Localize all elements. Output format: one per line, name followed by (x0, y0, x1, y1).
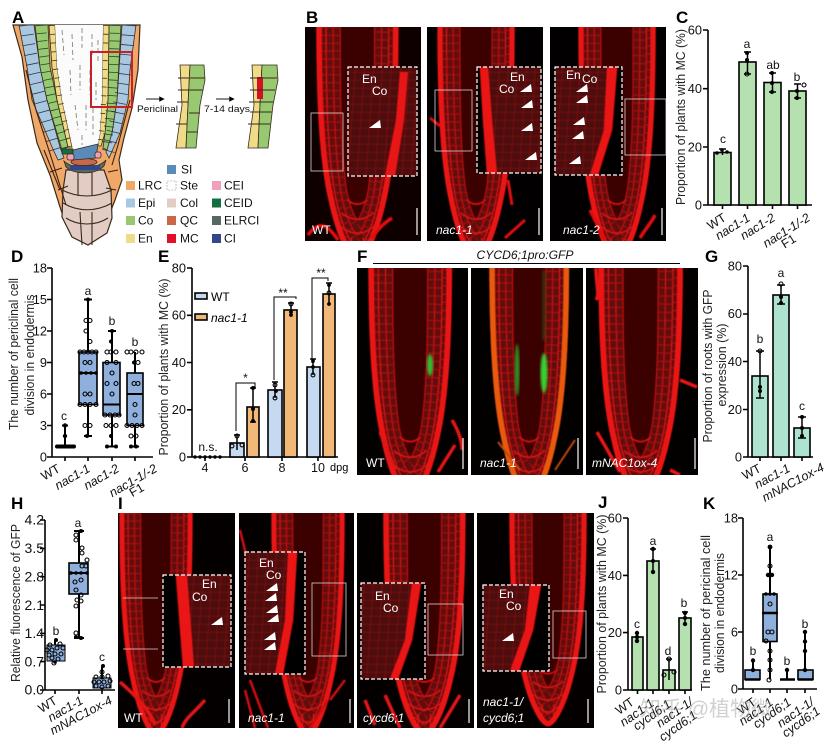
x labels (39, 461, 160, 500)
y title: division in endodermis (23, 294, 37, 416)
micrograph WT: Co (372, 84, 388, 98)
tick labels: 40 (608, 568, 622, 583)
legend (126, 162, 259, 246)
significance letters: d (665, 644, 671, 658)
legend: CEI (224, 178, 244, 192)
x labels: nac1-1/ (775, 694, 818, 730)
panel D: box plot (7, 247, 160, 500)
significance letters: a (767, 530, 774, 544)
micrograph WT: En (362, 72, 377, 86)
y title: Proportion of plants with MC (%) (674, 29, 688, 205)
legend: En (138, 232, 153, 246)
micrograph nac1-2: En (566, 68, 581, 82)
tick labels: 0.0 (25, 682, 44, 698)
arrow: periclinal (146, 98, 163, 100)
significance letters: a (744, 37, 751, 51)
tick labels: 6 (40, 386, 47, 402)
y title: Proportion of roots with GFP (701, 290, 715, 442)
significance letters: b (53, 624, 60, 638)
tick labels: 1.4 (25, 625, 44, 641)
legend: QC (180, 214, 198, 228)
tick labels: 4.2 (25, 512, 44, 528)
panel letter K: K (703, 494, 716, 513)
y title (701, 290, 729, 442)
y title: The number of periclinal cell (7, 278, 21, 430)
y title (699, 535, 727, 691)
legend: Epi (138, 196, 155, 210)
significance letters: c (61, 409, 67, 423)
significance brackets: * (243, 371, 248, 385)
label periclinal: Periclinal (137, 104, 178, 115)
axes (623, 518, 692, 694)
x labels (705, 210, 813, 251)
tick labels: 3.5 (25, 540, 44, 556)
tick labels (172, 260, 186, 464)
micrograph mNAC1ox-4 (586, 268, 698, 475)
significance letters (53, 516, 105, 664)
significance letters: b (784, 654, 791, 668)
x labels: 6 (242, 461, 249, 475)
panel F: GFP micrographs (357, 247, 698, 499)
tick labels: 60 (608, 510, 622, 526)
panel letter G: G (705, 247, 718, 266)
x labels: 4 (202, 461, 209, 475)
significance letters: a (85, 284, 92, 298)
micrograph nac1-2: nac1-2 (563, 223, 600, 237)
panel letter D: D (11, 247, 23, 266)
tick labels: 2.1 (25, 597, 44, 613)
detail: middle cortex (248, 65, 278, 148)
panel G: bar chart (701, 247, 826, 505)
axes (40, 520, 115, 694)
significance letters: a (650, 534, 657, 548)
panel B: confocal images (305, 8, 666, 259)
micrograph mNAC1ox-4: mNAC1ox-4 (592, 456, 658, 470)
y title (7, 278, 37, 430)
y title: Proportion of plants with MC (%) (595, 514, 609, 694)
micrograph cycd6;1: Co (383, 601, 399, 615)
tick labels: 2.8 (25, 568, 44, 584)
tick labels: 3 (40, 418, 47, 433)
boxes and whiskers (745, 546, 813, 680)
significance letters: c (634, 617, 640, 631)
significance letters: b (757, 332, 764, 346)
x labels: 10 (311, 461, 325, 475)
x labels: nac1-1 (713, 211, 753, 243)
highlight box (91, 52, 132, 107)
micrograph nac1-1: nac1-1 (436, 223, 473, 237)
micrograph nac1-1: nac1-1 (480, 456, 517, 470)
tick labels: 12 (724, 568, 738, 582)
x labels: 8 (279, 461, 286, 475)
legend: MC (180, 232, 199, 246)
significance letters: b (802, 617, 809, 631)
detail: periclinal division (176, 65, 205, 148)
tick labels: 20 (608, 625, 622, 640)
micrograph nac1-1 (427, 27, 543, 241)
x labels: F1 (779, 232, 799, 251)
micrograph WT: WT (124, 711, 143, 725)
x labels: cycd6;1 (779, 704, 823, 740)
micrograph nac1-1/cycd6;1 (477, 513, 594, 728)
x labels: nac1-1 (52, 461, 92, 493)
x labels (613, 694, 700, 741)
legend: WT (211, 290, 230, 304)
legend: ELRCI (224, 214, 259, 228)
legend: LRC (138, 178, 162, 192)
legend: Co (138, 214, 154, 228)
schematic root (13, 25, 140, 245)
panel K: box plot (699, 494, 823, 740)
y title: The number of pericinal cell (699, 535, 713, 691)
x labels: nac1-1 (617, 696, 657, 729)
x labels: mNAC1ox-4 (48, 693, 114, 738)
construct heading with rule: CYCD6;1pro:GFP (476, 250, 574, 262)
significance letters: a (75, 516, 82, 530)
x labels (202, 461, 348, 475)
significance brackets: ** (316, 266, 326, 280)
micrograph WT: WT (366, 456, 385, 470)
micrograph nac1-1/cycd6;1: nac1-1/ (483, 695, 525, 709)
tick labels: 40 (172, 355, 186, 370)
tick labels: 20 (688, 140, 702, 154)
micrograph nac1-1: En (259, 556, 274, 570)
panel letter E: E (158, 247, 169, 266)
tick labels: 0 (735, 450, 742, 464)
panel letter J: J (598, 493, 607, 512)
micrograph nac1-1: Co (499, 82, 515, 96)
x labels: cycd6;1 (750, 695, 794, 731)
x labels: nac1-1/-2 (107, 461, 160, 500)
micrograph nac1-1: En (510, 70, 525, 84)
tick labels: 20 (728, 402, 742, 417)
significance letters: ab (766, 58, 780, 72)
significance letters: c (720, 132, 726, 146)
tick labels: 0 (40, 450, 47, 464)
x labels: nac1-1 (752, 461, 792, 492)
significance letters: a (778, 266, 785, 280)
tick labels: 12 (33, 324, 47, 338)
micrograph nac1-1 (471, 268, 583, 475)
y title: Proportion of plants with MC (%) (157, 278, 171, 456)
panel letter B: B (306, 8, 318, 27)
legend: SI (181, 162, 192, 176)
significance letters: c (799, 399, 805, 413)
tick labels: 20 (172, 402, 186, 417)
tick labels: 0 (731, 682, 738, 696)
axes (743, 266, 813, 461)
tick labels (33, 260, 47, 464)
tick labels: 0.7 (25, 654, 44, 670)
micrograph cycd6;1 (357, 513, 474, 728)
legend: CEID (224, 196, 253, 210)
bars (632, 561, 691, 690)
panel J: bar chart (595, 493, 700, 741)
tick labels: 80 (172, 260, 186, 276)
significance letters: b (750, 644, 757, 658)
error bars and points (635, 547, 688, 680)
significance letters (720, 37, 801, 146)
panel letter A: A (12, 8, 24, 27)
significance letters: b (109, 314, 116, 328)
legend: Ste (180, 178, 198, 192)
data points (45, 529, 112, 689)
tick labels: 60 (688, 22, 702, 38)
label days: 7-14 days (204, 104, 250, 115)
panel E: grouped bar chart (157, 247, 348, 475)
significance letters (750, 530, 809, 668)
axes (47, 268, 153, 461)
significance brackets (198, 266, 328, 454)
panel C: bar chart (674, 8, 813, 251)
axes (738, 518, 817, 693)
x labels: cycd6;1 (630, 697, 674, 733)
x labels: nac1-2 (738, 211, 778, 243)
micrograph WT: WT (312, 223, 331, 237)
micrograph cycd6;1: En (375, 589, 390, 603)
y title: division in endodermis (713, 553, 727, 673)
micrograph nac1-2 (550, 27, 666, 241)
tick labels: 60 (728, 306, 742, 321)
tick labels: 80 (728, 258, 742, 274)
x labels: nac1-1 (736, 695, 776, 728)
legend: CI (224, 232, 236, 246)
x labels: dpg (330, 462, 348, 474)
data points (57, 298, 144, 448)
tick labels: 0 (179, 450, 186, 464)
x labels: WT (613, 695, 637, 718)
axes (187, 268, 338, 461)
tick labels: 0 (695, 198, 702, 212)
significance brackets: n.s. (198, 440, 218, 454)
boxes (47, 531, 111, 688)
significance letters (757, 266, 805, 413)
micrograph WT (357, 268, 468, 475)
tick labels: 40 (688, 81, 702, 96)
significance letters (61, 284, 139, 423)
tick labels: 60 (172, 308, 186, 322)
error bars and points (756, 282, 806, 438)
panel letter H: H (11, 494, 23, 513)
tick labels: 40 (728, 354, 742, 369)
error bars and points (715, 51, 806, 155)
micrograph nac1-2: Co (582, 72, 598, 86)
x labels: F1 (127, 480, 147, 500)
tick labels: 0 (615, 682, 622, 698)
bars (230, 294, 335, 457)
x labels: nac1-1/-2 (760, 211, 813, 251)
tick labels: 15 (33, 292, 47, 307)
tick labels: 6 (731, 624, 738, 640)
micrograph WT (305, 27, 421, 241)
tick labels (608, 510, 622, 698)
micrograph WT: Co (192, 590, 208, 604)
tick labels (25, 512, 44, 698)
panel letter C: C (676, 8, 688, 27)
x labels: WT (705, 210, 729, 233)
micrograph nac1-1/cycd6;1: Co (506, 599, 522, 613)
x labels: WT (36, 693, 60, 716)
significance letters: c (99, 650, 105, 664)
panel A: root tissue schematic (12, 8, 278, 246)
micrograph nac1-1/cycd6;1: En (499, 587, 514, 601)
bars (752, 295, 810, 457)
micrograph WT: En (202, 577, 217, 591)
bars (714, 62, 806, 205)
watermark: 知乎 @植物微 (640, 698, 772, 721)
tick labels: 18 (724, 510, 738, 526)
legend (195, 290, 248, 325)
significance letters (634, 534, 688, 658)
panel H: box plot (9, 494, 115, 738)
axes (703, 30, 812, 209)
tick labels: 9 (40, 355, 47, 370)
tick labels: 18 (33, 260, 47, 276)
tick labels (688, 22, 702, 212)
legend: Col (180, 196, 198, 210)
error bars and points (193, 283, 332, 459)
arrow: 7-14 days (216, 98, 233, 100)
data points (751, 545, 807, 682)
tick labels (728, 258, 742, 464)
panel letter I: I (118, 494, 123, 513)
x labels: nac1-2 (81, 461, 122, 493)
micrograph cycd6;1: cycd6;1 (363, 711, 404, 725)
significance letters: b (794, 70, 801, 84)
x labels (735, 694, 823, 740)
x labels: WT (735, 695, 759, 718)
micrograph nac1-1/cycd6;1: cycd6;1 (483, 711, 524, 725)
x labels: mNAC1ox-4 (760, 460, 826, 505)
x labels: nac1-1/ (654, 694, 697, 730)
significance letters: b (681, 596, 688, 610)
micrograph nac1-1: nac1-1 (248, 711, 285, 725)
micrograph nac1-1 (239, 513, 354, 728)
tick labels (724, 510, 738, 696)
micrograph nac1-1: Co (266, 568, 282, 582)
legend: nac1-1 (211, 311, 248, 325)
panel letter F: F (357, 247, 367, 266)
significance brackets: ** (278, 286, 288, 300)
y title: Relative fluorescence of GFP (9, 524, 23, 682)
significance letters: b (132, 335, 139, 349)
micrograph WT (118, 513, 235, 728)
y title: expression (%) (715, 324, 729, 406)
x labels: WT (39, 461, 63, 483)
boxes and whiskers (56, 300, 143, 446)
x labels: nac1-1 (45, 693, 86, 725)
panel I: confocal images (118, 494, 594, 734)
x labels: WT (740, 461, 764, 483)
